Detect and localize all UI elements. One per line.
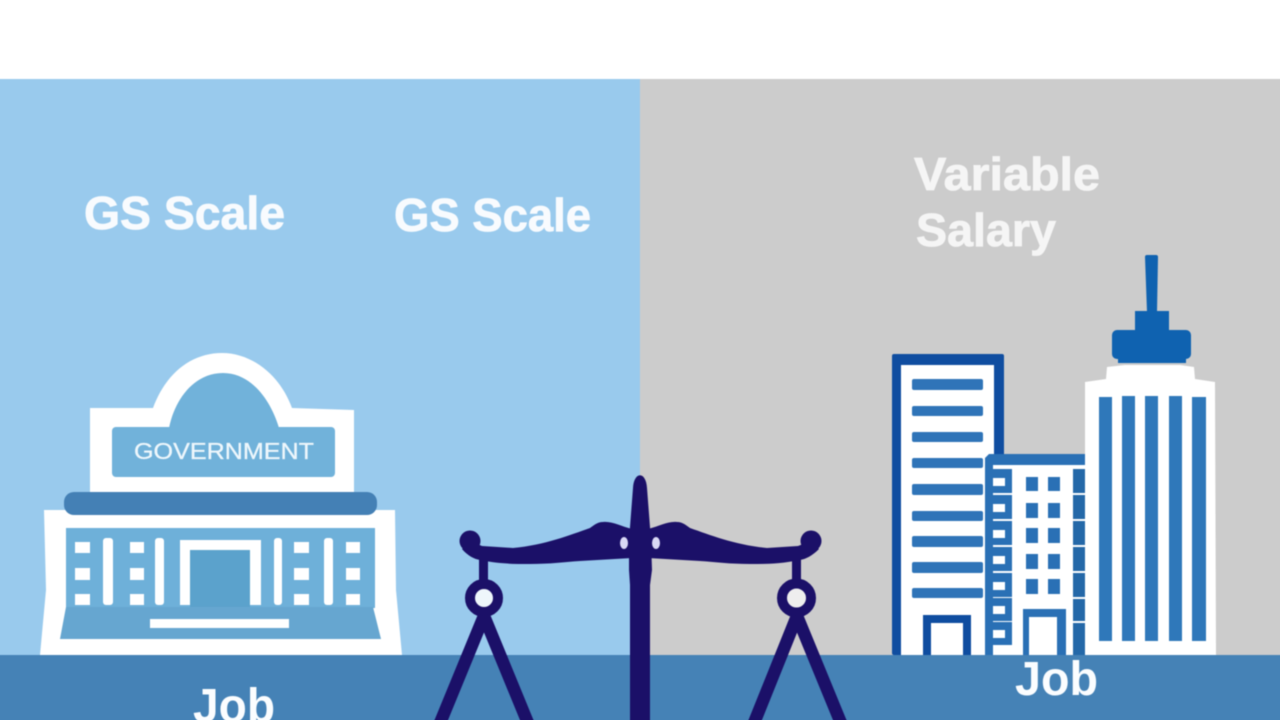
beam left knob — [460, 530, 480, 552]
icon: city buildings — [892, 255, 1216, 655]
beam left arm — [462, 522, 632, 564]
middle building — [985, 454, 1085, 655]
panel: private side background — [640, 79, 1280, 656]
lower white facade — [40, 510, 402, 655]
door — [180, 540, 261, 605]
heading: Variable Salary: Variable — [914, 148, 1100, 200]
facade inner — [66, 528, 375, 608]
left ring — [470, 584, 498, 612]
sign label: GOVERNMENT — [134, 438, 314, 464]
beam right knob — [800, 530, 822, 552]
panel: government side background — [0, 79, 640, 656]
label: Job right: Job — [1015, 653, 1098, 706]
dome inner — [169, 373, 279, 428]
heading: Variable Salary: Salary — [916, 204, 1056, 256]
heading: GS Scale left: GS Scale — [84, 187, 285, 239]
right tower — [1085, 255, 1216, 655]
beam right arm — [648, 522, 819, 564]
windows and pillars — [75, 538, 360, 605]
left hanger — [479, 558, 488, 582]
icon: balance scale — [438, 475, 843, 720]
right hanger — [792, 558, 801, 582]
left legs — [438, 616, 530, 720]
tower antenna and crown — [1112, 255, 1191, 363]
ground band — [0, 655, 1280, 720]
icon: government building — [40, 353, 402, 655]
heading: GS Scale right: GS Scale — [394, 189, 591, 241]
central post — [629, 475, 652, 720]
sign panel — [112, 427, 335, 477]
right legs — [752, 616, 843, 720]
heading: Variable Salary — [914, 148, 1100, 256]
left tower — [892, 354, 1004, 655]
beam pivot holes — [620, 537, 660, 549]
right ring — [782, 584, 811, 612]
right window column — [1073, 469, 1085, 655]
base steps — [60, 607, 381, 639]
roof band — [64, 492, 377, 515]
step line — [150, 619, 289, 628]
building upper white block with dome — [90, 353, 354, 492]
